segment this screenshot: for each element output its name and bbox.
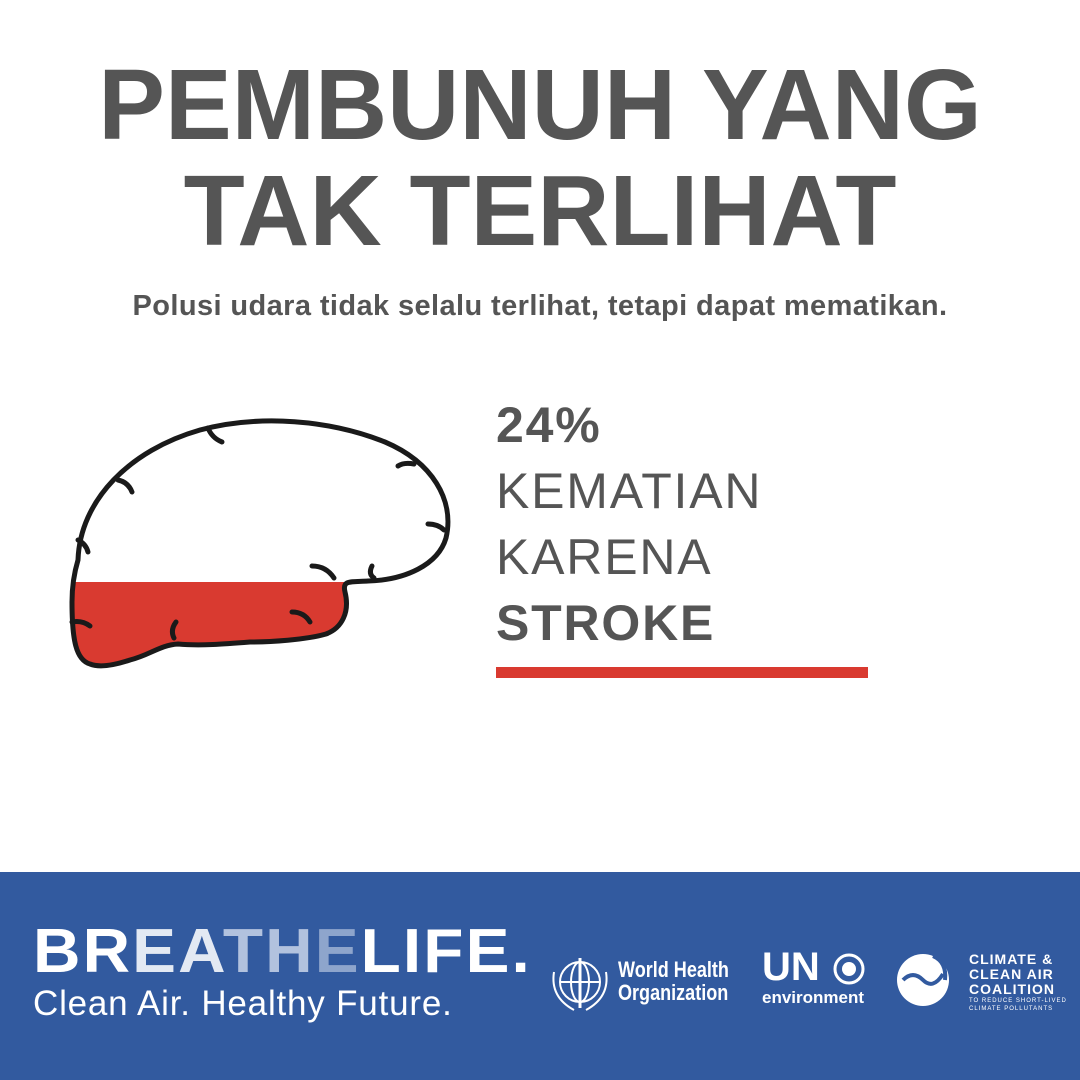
title [98,49,982,267]
tagline: Clean Air. Healthy Future. [33,984,453,1023]
CCAC logo [897,951,1067,1012]
red underline [496,667,868,678]
UN environment logo: UN [762,945,820,989]
title: PEMBUNUH YANG [98,49,982,161]
CCAC logo: CLEAN AIR [969,966,1054,982]
icon: brain [70,418,450,668]
UN environment logo [762,945,864,1007]
title: TAK TERLIHAT [184,155,896,267]
WHO logo: World Health [618,957,729,982]
footer [0,872,1080,1080]
stat text: KEMATIAN [496,463,762,519]
CCAC logo: COALITION [969,981,1055,997]
stat text: KARENA [496,529,712,585]
breathelife logo: BREATHELIFE. [33,917,532,986]
stat text [496,397,762,651]
WHO logo: Organization [618,980,728,1005]
CCAC logo: CLIMATE POLLUTANTS [969,1006,1053,1012]
subtitle: Polusi udara tidak selalu terlihat, tetapi dapat mematikan. [133,290,947,322]
UN environment logo: environment [762,988,864,1007]
stat text: STROKE [496,595,715,651]
CCAC logo: TO REDUCE SHORT-LIVED [969,998,1067,1004]
CCAC logo: CLIMATE & [969,951,1053,967]
WHO logo [552,957,729,1011]
stat text: 24% [496,397,601,453]
